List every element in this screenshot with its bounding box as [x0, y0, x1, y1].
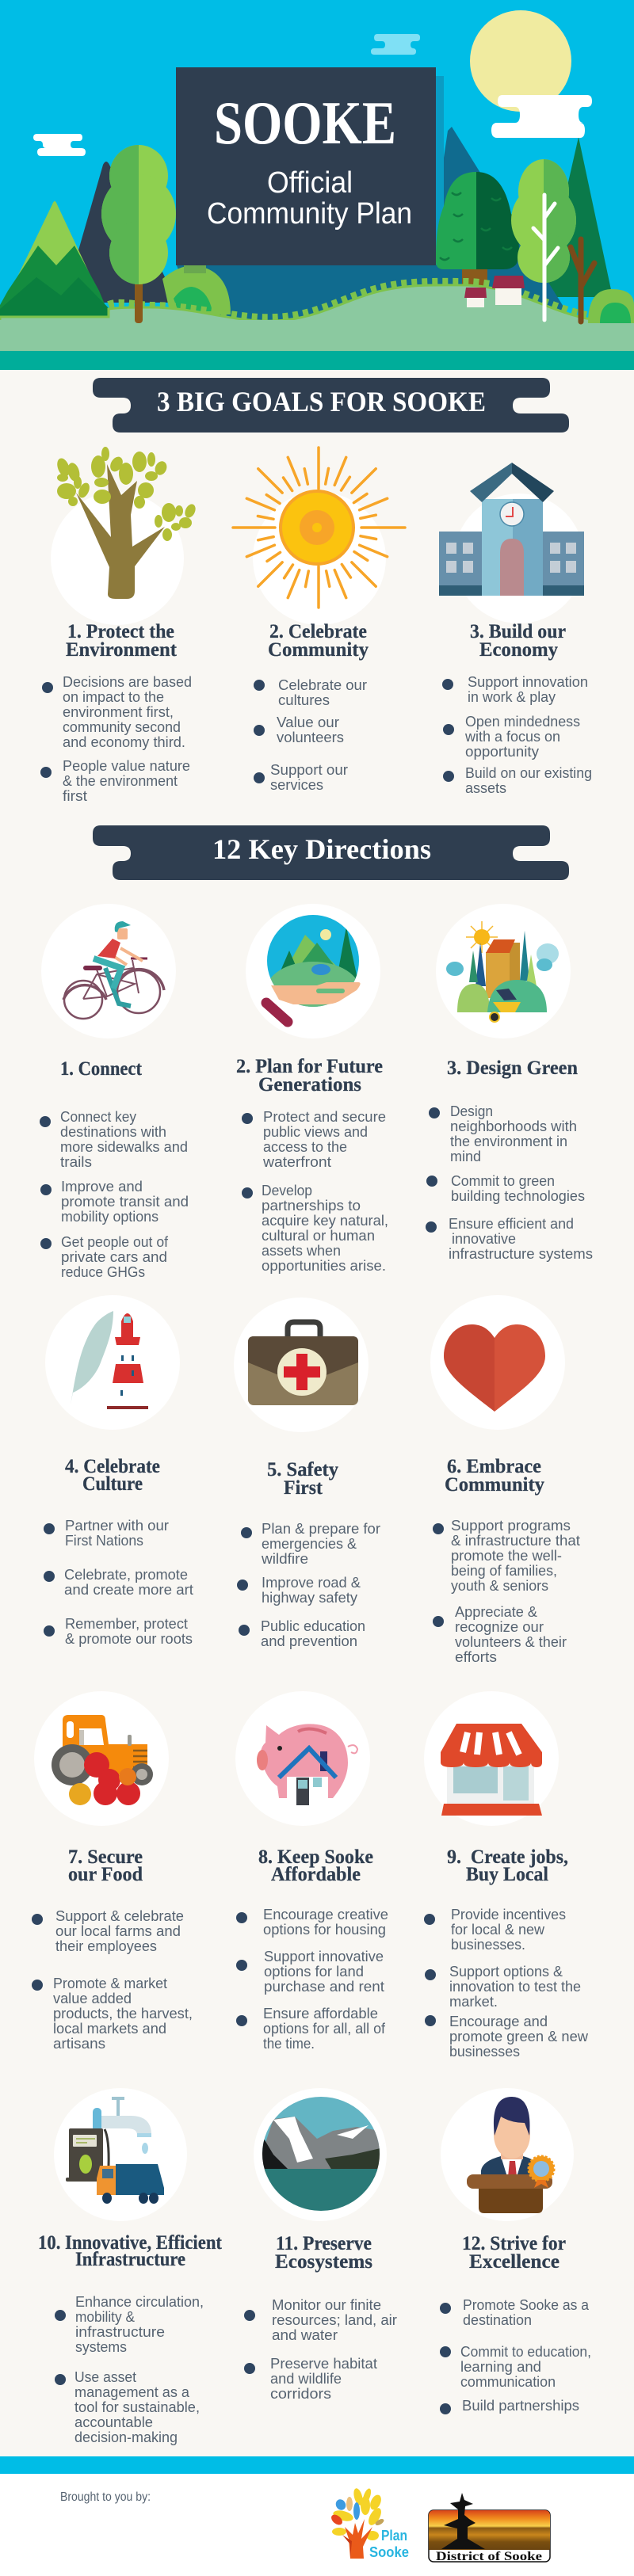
bullets: Develop	[262, 1183, 312, 1198]
heading: Buy Local	[466, 1864, 548, 1885]
bullets: and wildlife	[270, 2371, 342, 2387]
icon: first aid kit	[234, 1298, 369, 1432]
heading	[236, 1056, 383, 1096]
icon: tap, fuel pump and truck	[54, 2088, 187, 2221]
bullets: Encourage and	[449, 2014, 548, 2029]
panel: 6 embrace community	[430, 1295, 580, 1665]
bullets: Build partnerships	[462, 2398, 579, 2414]
banner: 12 key directions	[93, 825, 569, 880]
bullets: efforts	[455, 1649, 497, 1665]
bullets	[40, 1109, 189, 1280]
icon: left cloud	[33, 134, 86, 156]
heading: Affordable	[271, 1864, 361, 1885]
bullets: public views and	[263, 1124, 368, 1140]
heading: 11. Preserve	[276, 2233, 372, 2254]
panel: goal 1 protect the environment	[40, 447, 197, 804]
heading	[258, 1846, 373, 1885]
bullets	[442, 674, 592, 796]
bullets: Promote Sooke as a	[463, 2297, 590, 2313]
bullets: being of families,	[451, 1563, 557, 1579]
bullets: private cars and	[61, 1249, 167, 1265]
title: SOOKE: SOOKE	[214, 89, 396, 157]
bullets: Ensure efficient and	[449, 1216, 574, 1232]
logo: Plan Sooke: Plan	[381, 2528, 407, 2544]
icon: pale cloud	[371, 34, 420, 55]
icon: heart	[430, 1295, 565, 1430]
panel: hero illustration	[0, 0, 634, 370]
bullets: assets when	[262, 1243, 341, 1259]
bullets: Protect and secure	[263, 1109, 386, 1125]
bullets: Enhance circulation,	[75, 2294, 204, 2310]
subtitle: Official	[267, 166, 353, 200]
icon: town hall on white circle	[439, 463, 584, 623]
heading	[275, 2233, 372, 2273]
bullets: decision-making	[74, 2429, 178, 2445]
icon: speaker at podium	[441, 2088, 574, 2221]
bullets: and prevention	[261, 1633, 357, 1649]
logo: District of Sooke: District of Sooke	[436, 2550, 542, 2563]
panel: 10 innovative efficient infrastructure	[38, 2088, 223, 2445]
heading: 3. Design Green	[447, 1057, 578, 1079]
heading	[268, 621, 369, 661]
heading: Excellence	[469, 2251, 560, 2273]
icon: bush	[162, 265, 231, 314]
bullets: Support our	[270, 762, 348, 778]
bullets: Celebrate, promote	[64, 1567, 188, 1583]
bullets: in work & play	[468, 689, 556, 705]
panel: 8 keep sooke affordable	[235, 1691, 388, 2052]
bullets: options for land	[264, 1964, 364, 1980]
bullets: Remember, protect	[65, 1616, 188, 1632]
footer blue bar	[0, 2456, 634, 2474]
bullets: Improve and	[61, 1179, 143, 1195]
bullets: their employees	[55, 1938, 157, 1954]
bullets: Promote & market	[53, 1976, 167, 1991]
icon: right bush	[588, 289, 634, 323]
banner: 3 big goals: 3 BIG GOALS FOR SOOKE	[157, 386, 486, 417]
bullets: first	[63, 788, 87, 804]
heading: our Food	[68, 1864, 143, 1885]
icon: tractor and tomatoes	[34, 1691, 169, 1826]
icon: right light tree	[511, 159, 576, 320]
bullets: opportunities arise.	[262, 1258, 386, 1274]
icon: tree on white circle	[51, 447, 197, 625]
bullets: accountable	[74, 2414, 153, 2430]
bullets: systems	[75, 2339, 127, 2355]
bullets: & the environment	[63, 773, 178, 789]
bullets	[32, 1908, 193, 2052]
heading: Community	[445, 1474, 544, 1496]
heading: 12. Strive for	[462, 2233, 566, 2254]
heading	[470, 621, 566, 661]
bullets	[55, 2294, 204, 2445]
bullets: emergencies &	[262, 1536, 357, 1552]
bullets: infrastructure systems	[449, 1246, 593, 1262]
panel: 9 create jobs buy local	[424, 1691, 589, 2060]
bullets	[44, 1518, 193, 1647]
icon: dark left mountain	[63, 162, 178, 303]
icon: large house	[492, 276, 525, 305]
bullets: corridors	[270, 2386, 331, 2402]
bullets: trails	[60, 1154, 92, 1170]
bullets: Ensure affordable	[263, 2006, 378, 2022]
heading: 3. Build our	[470, 621, 566, 642]
bullets: and water	[272, 2327, 338, 2343]
heading: 10. Innovative, Efficient	[38, 2232, 223, 2254]
bullets: Preserve habitat	[270, 2356, 377, 2372]
bullets: promote green & new	[449, 2029, 589, 2044]
bullets: purchase and rent	[264, 1979, 384, 1995]
bullets: services	[270, 777, 323, 793]
bullets: Provide incentives	[451, 1907, 566, 1922]
bullets: Use asset	[74, 2369, 136, 2385]
icon: sun on white circle	[200, 410, 434, 645]
bullets: innovation to test the	[449, 1979, 581, 1995]
icon: green mountain	[0, 201, 111, 319]
heading: 4. Celebrate	[65, 1456, 160, 1477]
icon: shadow of title panel	[436, 76, 444, 265]
bullets: with a focus on	[464, 729, 560, 745]
bullets: the time.	[263, 2036, 315, 2052]
heading: Culture	[82, 1473, 143, 1495]
bullets: destinations with	[60, 1124, 166, 1140]
subtitle: Community Plan	[207, 197, 412, 231]
bullets: assets	[465, 780, 506, 796]
heading	[445, 1456, 544, 1496]
panel: 5 safety first	[234, 1298, 380, 1649]
icon: large white cloud	[491, 95, 592, 138]
bullets: businesses.	[451, 1937, 525, 1953]
bullets: management as a	[74, 2384, 190, 2400]
bullets	[40, 674, 192, 804]
bullets	[244, 2297, 397, 2402]
bullets: tool for sustainable,	[74, 2399, 200, 2415]
bullets: Decisions are based	[63, 674, 192, 690]
bullets: neighborhoods with	[450, 1118, 577, 1134]
bullets: environment first,	[63, 704, 174, 720]
panel: 12 strive for excellence	[440, 2088, 591, 2414]
logo: Plan Sooke	[330, 2487, 409, 2560]
icon: village with wheelbarrow	[436, 904, 571, 1038]
bullets: products, the harvest,	[53, 2006, 193, 2022]
heading: First	[284, 1477, 323, 1499]
logo: Plan Sooke: Sooke	[369, 2544, 409, 2560]
heading: Generations	[258, 1074, 361, 1096]
bullets: options for all, all of	[263, 2021, 386, 2037]
bullets: for local & new	[451, 1922, 545, 1938]
bullets: Support programs	[451, 1518, 571, 1534]
bullets: Commit to education,	[460, 2344, 591, 2360]
bullets: waterfront	[262, 1154, 331, 1170]
bullets: destination	[463, 2312, 532, 2328]
bullets: highway safety	[262, 1590, 357, 1606]
icon: small house	[464, 288, 487, 307]
bullets: recognize our	[455, 1619, 544, 1635]
heading: 9. Create jobs,	[447, 1846, 568, 1868]
bullets: promote the well-	[451, 1548, 562, 1564]
bullets: Partner with our	[65, 1518, 169, 1534]
heading: Environment	[66, 639, 178, 661]
icon: dark round tree	[436, 172, 519, 289]
bullets: acquire key natural,	[262, 1213, 388, 1229]
heading: Community	[268, 639, 369, 661]
bullets	[236, 1907, 388, 2052]
bullets	[426, 1103, 593, 1262]
heading	[38, 2232, 223, 2270]
bullets: on impact to the	[63, 689, 164, 705]
heading	[267, 1459, 338, 1499]
bullets: innovative	[452, 1231, 516, 1247]
bullets: Plan & prepare for	[262, 1521, 380, 1537]
bullets: Open mindedness	[465, 714, 580, 730]
bullets: youth & seniors	[451, 1578, 548, 1594]
bullets: communication	[460, 2374, 556, 2390]
bullets: Encourage creative	[263, 1907, 388, 1922]
bullets	[440, 2297, 591, 2414]
icon: sun	[470, 10, 571, 112]
icon: piggy bank house	[235, 1691, 370, 1826]
heading	[462, 2233, 566, 2273]
heading: 6. Embrace	[447, 1456, 541, 1477]
bullets: more sidewalks and	[60, 1139, 188, 1155]
bullets: the environment in	[450, 1134, 567, 1149]
bullets: artisans	[53, 2036, 105, 2052]
icon: mountain lake	[254, 2088, 387, 2221]
credit text: Brought to you by:	[60, 2490, 151, 2504]
bullets: volunteers & their	[455, 1634, 567, 1650]
icon: storefront	[424, 1691, 559, 1826]
heading: 2. Celebrate	[269, 621, 367, 642]
bullets: mobility &	[75, 2309, 135, 2325]
bullets: & infrastructure that	[451, 1533, 580, 1549]
panel: goal 3 build our economy	[439, 463, 592, 796]
bullets: First Nations	[65, 1533, 143, 1549]
bullets: Commit to green	[451, 1173, 555, 1189]
bullets: access to the	[263, 1139, 347, 1155]
bullets: businesses	[449, 2044, 520, 2060]
bullets: reduce GHGs	[61, 1264, 145, 1280]
bullets	[433, 1518, 580, 1665]
bullets: and economy third.	[63, 734, 185, 750]
bullets: cultural or human	[262, 1228, 375, 1244]
heading: Ecosystems	[275, 2251, 372, 2273]
bullets: promote transit and	[61, 1194, 189, 1210]
icon: feather and lighthouse	[45, 1295, 180, 1430]
band: teal strip	[0, 351, 634, 370]
heading	[66, 621, 178, 661]
bullets: cultures	[278, 692, 330, 708]
bullets: Connect key	[60, 1109, 136, 1125]
heading	[65, 1456, 160, 1495]
bullets: value added	[53, 1991, 132, 2006]
bullets: Design	[450, 1103, 493, 1119]
bullets	[254, 677, 367, 793]
logo: District of Sooke	[429, 2493, 550, 2563]
heading	[447, 1846, 568, 1885]
bullets: Get people out of	[61, 1234, 169, 1250]
panel: 3 design green	[426, 904, 593, 1262]
bullets: resources; land, air	[272, 2312, 397, 2328]
title panel	[176, 67, 436, 265]
banner: 3 big goals	[93, 378, 569, 433]
bullets: opportunity	[465, 744, 539, 760]
bullets: learning and	[460, 2359, 541, 2375]
icon: left tall tree	[101, 145, 176, 323]
icon: hand holding globe	[246, 904, 380, 1038]
panel: goal 2 celebrate community	[200, 410, 434, 793]
bullets	[424, 1907, 589, 2060]
bullets: People value nature	[63, 758, 190, 774]
icon: brown bare tree	[571, 239, 594, 322]
banner: 12 key directions: 12 Key Directions	[212, 833, 431, 865]
bullets: options for housing	[263, 1922, 386, 1938]
bullets: Build on our existing	[465, 765, 592, 781]
icon: blue mountain and water	[177, 127, 566, 325]
heading	[68, 1846, 143, 1885]
icon: cyclist	[41, 904, 176, 1038]
icon: far right pine	[542, 137, 613, 297]
bullets	[237, 1521, 380, 1649]
bullets: mind	[450, 1149, 481, 1164]
bullets: Improve road &	[262, 1575, 361, 1591]
bullets: Monitor our finite	[272, 2297, 381, 2313]
panel: 1 connect	[40, 904, 189, 1280]
bullets: partnerships to	[262, 1198, 361, 1214]
bullets: Appreciate &	[455, 1604, 537, 1620]
icon: ground	[0, 282, 634, 352]
panel: 7 secure our food	[32, 1691, 193, 2052]
heading: 1. Connect	[60, 1058, 143, 1080]
bullets: our local farms and	[55, 1923, 181, 1939]
bullets: Support options &	[449, 1964, 563, 1980]
bullets: & promote our roots	[65, 1631, 193, 1647]
bullets: wildfire	[261, 1551, 308, 1567]
bullets: building technologies	[451, 1188, 585, 1204]
bullets: local markets and	[53, 2021, 166, 2037]
bullets: Support innovative	[264, 1949, 384, 1964]
bullets	[242, 1109, 388, 1274]
heading: 5. Safety	[267, 1459, 338, 1480]
subtitle	[207, 166, 412, 231]
bullets: and create more art	[64, 1582, 193, 1598]
panel: 2 plan for future generations	[236, 904, 388, 1274]
heading: Infrastructure	[75, 2249, 185, 2270]
panel: 11 preserve ecosystems	[244, 2088, 397, 2402]
bullets: mobility options	[61, 1209, 158, 1225]
bullets: Support innovation	[468, 674, 588, 690]
bullets: Public education	[261, 1618, 365, 1634]
heading: 2. Plan for Future	[236, 1056, 383, 1077]
bullets: Value our	[277, 714, 339, 730]
bullets: community second	[63, 719, 181, 735]
bullets: market.	[449, 1994, 498, 2010]
bullets: Celebrate our	[278, 677, 367, 693]
heading: 1. Protect the	[67, 621, 174, 642]
panel: 4 celebrate culture	[44, 1295, 193, 1647]
heading: 8. Keep Sooke	[258, 1846, 373, 1868]
heading: 7. Secure	[68, 1846, 143, 1868]
bullets: Support & celebrate	[55, 1908, 184, 1924]
bullets: infrastructure	[75, 2324, 165, 2340]
bullets: volunteers	[277, 730, 344, 745]
heading: Economy	[479, 639, 558, 661]
panel: footer	[0, 2474, 634, 2576]
